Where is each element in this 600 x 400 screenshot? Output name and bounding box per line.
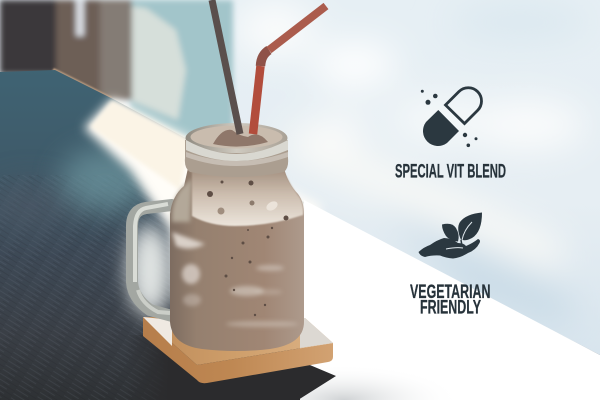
drink body	[170, 168, 304, 351]
glass shoulder left	[172, 178, 192, 222]
sunlight patch on table	[84, 98, 320, 300]
glass mug of chocolate shake	[132, 123, 304, 351]
foam layer	[192, 172, 303, 226]
label: vegetarian friendly: VEGETARIAN	[410, 282, 490, 303]
mug handle	[132, 204, 172, 316]
jar neck and lid rim	[185, 140, 288, 177]
chocolate ice on top	[213, 130, 268, 147]
red bendy straw	[253, 6, 326, 134]
label: special vit blend: SPECIAL VIT BLEND	[395, 162, 506, 182]
ice smears	[172, 232, 298, 327]
coaster shadow on table	[125, 335, 336, 400]
distant sunlit ledge	[203, 95, 231, 121]
icon: hand holding plant	[418, 212, 482, 258]
wooden coaster	[143, 317, 333, 383]
window frame left	[0, 0, 233, 139]
label: vegetarian friendly: FRIENDLY	[420, 298, 481, 318]
icon: vitamin capsule	[421, 88, 482, 147]
dark straw	[212, 0, 240, 134]
label: vegetarian friendly	[410, 282, 490, 318]
bubbles	[207, 180, 288, 316]
